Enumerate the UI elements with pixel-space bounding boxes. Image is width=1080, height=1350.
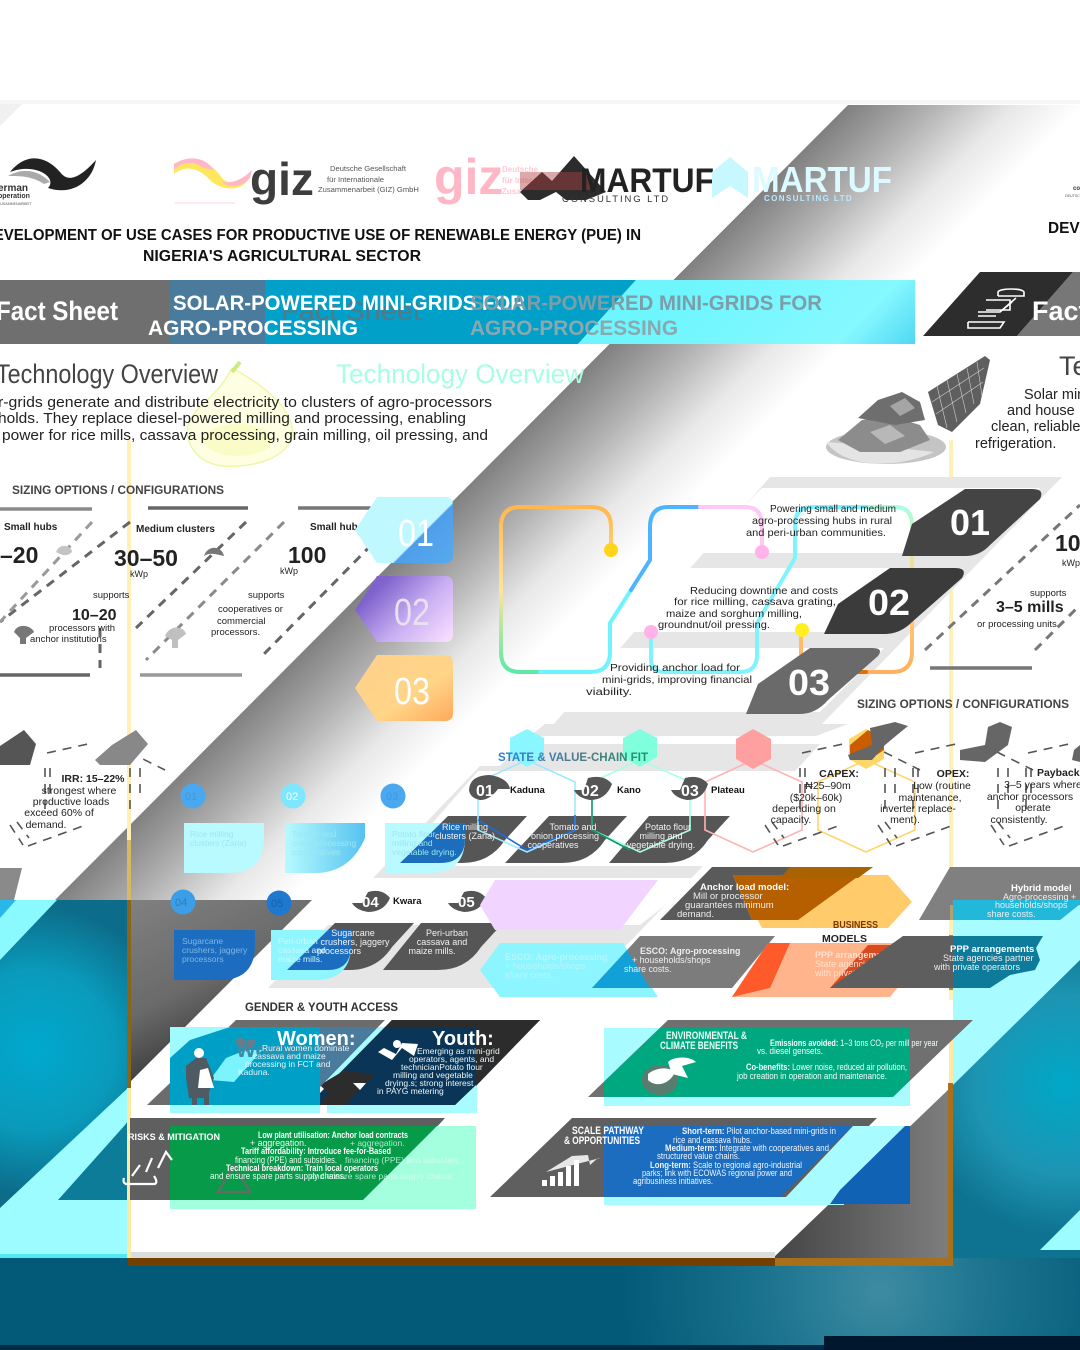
text: payback — [987, 767, 1080, 826]
panel: youth: drying.s; strong interest — [385, 1078, 474, 1088]
banner: fact sheet title bar: Fact Sheet — [0, 296, 118, 326]
chevron 03 — [355, 655, 453, 721]
location cards row 2: maize mills. — [278, 954, 322, 964]
business model PPP ghost: with private operators — [933, 962, 1021, 972]
panel: environmental and climate benefits: job creation in operation and maintenance. — [736, 1071, 887, 1082]
text: overview paragraph — [0, 395, 492, 444]
state card text row 1: milling and — [639, 831, 683, 841]
panel: scale pathway and opportunities: rice and cassava hubs. — [673, 1135, 752, 1146]
text: IRR: IRR: 15–22% — [61, 773, 125, 785]
panel: risks and mitigation: + aggregation. — [250, 1138, 306, 1148]
hex caps left — [0, 730, 148, 765]
panel: scale pathway and opportunities — [490, 1118, 910, 1205]
banner: fact sheet title bar: Fact Sheet — [281, 296, 422, 326]
card: medium clusters: commercial — [217, 616, 266, 627]
benefit 03 text: viability. — [586, 686, 632, 698]
text: IRR: demand. — [26, 819, 66, 831]
location cards row 1: Rice milling — [190, 829, 234, 839]
text: anchor load model: demand. — [677, 909, 714, 920]
state hex caps — [510, 729, 884, 769]
state card text row 1: onion processing — [531, 831, 599, 841]
state blobs row 2 and labels: 04 — [362, 894, 379, 911]
panel: environmental and climate benefits: Co-benefits: Lower noise, reduced air pollution, — [746, 1062, 907, 1073]
benefit 02 text: for rice milling, cassava grating, — [674, 596, 836, 608]
text: CAPEX — [771, 768, 859, 826]
chevron 03: 03 — [394, 671, 430, 713]
location cards row 2: cassava and — [278, 945, 326, 955]
heading: state and value-chain fit: STATE & VALUE-CHAIN FIT — [498, 752, 648, 764]
logo: Martuf dark: CONSULTING LTD — [562, 194, 670, 205]
state card text row 2: Sugarcane — [331, 928, 375, 938]
business model salmon panel: share costs. — [624, 964, 671, 974]
panel: scale pathway and opportunities: Long-term: Scale to regional agro-industrial — [650, 1160, 802, 1171]
panel: risks and mitigation: and ensure spare parts supply chains. — [210, 1171, 346, 1181]
benefit 01 text: Powering small and medium — [770, 503, 896, 515]
logo: Martuf dark: MARTUF — [580, 162, 714, 200]
location cards row 2: crushers, jaggery — [182, 945, 248, 955]
banner: fact sheet title bar: AGRO-PROCESSING — [470, 317, 678, 340]
logo: right ghost: co — [1073, 186, 1080, 192]
state card text row 2: cassava and — [417, 937, 467, 947]
benefit 02 text — [658, 585, 838, 631]
panel: environmental and climate benefits: CLIMATE BENEFITS — [660, 1040, 738, 1052]
location cards row 2: processors — [182, 954, 224, 964]
logo: Martuf dark — [520, 156, 714, 205]
panel: environmental and climate benefits: ENVIRONMENTAL & — [666, 1030, 747, 1042]
panel: women — [147, 1020, 385, 1113]
logo: GIZ pink: für Inter — [502, 176, 532, 185]
benefit 02 tile — [824, 568, 964, 634]
panel: youth — [310, 1020, 540, 1113]
panel: environmental and climate benefits: vs. diesel gensets. — [757, 1046, 823, 1057]
business model orange panel: MODELS — [822, 933, 867, 945]
card: small hubs left: 10–20 — [72, 607, 117, 624]
panel: youth: in PAYG metering — [377, 1086, 444, 1096]
location cards row 2: Peri-urban — [278, 936, 318, 946]
location cards row 1: clusters (Zaria) — [190, 838, 247, 848]
text: overview paragraph: holds. They replace diesel-powered milling and processing, enabling — [0, 411, 466, 427]
finance hex dashed lines — [765, 744, 1069, 846]
state card text row 2: maize mills. — [408, 946, 456, 956]
heading: sizing options right: SIZING OPTIONS / CONFIGURATIONS — [857, 699, 1069, 711]
panel: environmental and climate benefits: Emissions avoided: 1–3 tons CO₂ per mill per year — [770, 1038, 939, 1049]
location cards row 1: Tomato and — [292, 829, 337, 839]
panel: women: Women: — [277, 1028, 356, 1050]
logo: Martuf cyan: MARTUF — [752, 159, 892, 200]
location cards row 1: cooperatives — [292, 847, 340, 857]
logo: GIZ pink: giz — [434, 149, 503, 205]
card: small hubs middle: 100 — [288, 542, 326, 568]
location dots 01-03: 01 — [185, 791, 197, 803]
text: CAPEX: capacity. — [771, 814, 811, 826]
logo: GIZ gray — [174, 153, 419, 205]
benefit 02 text: maize and sorghum milling, — [666, 608, 802, 620]
card: medium clusters: processors. — [211, 627, 260, 638]
banner: fact sheet title bar: SOLAR-POWERED MINI-GRIDS FOR — [470, 292, 822, 315]
business model hybrid ghost: share costs. — [987, 909, 1036, 919]
panel: women: Rural women dominate — [262, 1043, 350, 1053]
state card text row 1: cooperatives — [527, 840, 579, 850]
state card text row 2: processors — [317, 946, 362, 956]
business model hybrid ghost: Agro-processing + — [1003, 892, 1076, 902]
text: overview paragraph right: and house — [1007, 403, 1075, 419]
business model PPP ghost: State agencies partner — [943, 953, 1034, 963]
logo: GIZ pink: Deutsche — [502, 165, 539, 174]
card: right sizing ghost: or processing units — [977, 619, 1057, 630]
card: small hubs middle: Small hubs — [310, 522, 364, 533]
text: OPEX: OPEX: — [937, 768, 969, 780]
text: anchor load model — [677, 882, 789, 920]
benefit 03 text: Providing anchor load for — [610, 662, 741, 674]
location cards row 2: Sugarcane — [182, 936, 223, 946]
panel: scale pathway and opportunities: structured value chains. — [657, 1151, 740, 1162]
text: anchor load model: Anchor load model: — [700, 882, 789, 893]
text: IRR — [24, 773, 125, 831]
panel: youth: Emerging as mini-grid — [417, 1046, 500, 1056]
location cards row 1: vegetable drying. — [392, 847, 457, 857]
panel: risks and mitigation: + aggregation. — [350, 1138, 405, 1148]
text: overview paragraph: power for rice mills, cassava processing, grain milling, oil pressing, and — [2, 428, 488, 444]
location dots 04-05: 04 — [175, 897, 187, 909]
finance hex caps — [848, 722, 1080, 762]
state card text row 1: Potato flour — [645, 822, 691, 832]
card: small hubs left — [0, 522, 130, 645]
state number blobs and labels: 01 — [476, 783, 494, 800]
location cards row 1: Potato flour — [392, 829, 436, 839]
benefit 01 tile — [902, 489, 1041, 556]
panel: women: cassava and maize — [253, 1051, 326, 1061]
title — [0, 220, 1080, 265]
state blobs row 2 and labels — [352, 891, 534, 912]
card: right sizing ghost: 10 — [1055, 530, 1080, 556]
text: overview paragraph right: clean, reliable — [991, 419, 1080, 435]
benefit 01 tile: 01 — [950, 502, 990, 543]
panel: youth: Youth: — [432, 1028, 494, 1050]
top light strip — [0, 100, 1080, 104]
logo: GIZ gray: giz — [250, 153, 314, 205]
logo: Martuf cyan — [712, 157, 892, 203]
banner: right dark fact sheet tile — [923, 272, 1080, 336]
panel: scale pathway and opportunities: SCALE PATHWAY — [572, 1125, 645, 1137]
banner: fact sheet title bar: SOLAR-POWERED MINI-GRIDS FOR — [173, 292, 525, 315]
snake connector lines — [501, 507, 912, 672]
business model PPP ghost: PPP arrangements — [950, 944, 1034, 955]
business model pink panel — [480, 880, 658, 930]
location cards row 2 — [174, 930, 351, 980]
benefit 02 tile: 02 — [868, 582, 910, 623]
cards: sizing configuration outlines — [0, 508, 396, 675]
panel: risks and mitigation: Technical breakdown: Train local operators — [226, 1163, 378, 1173]
logo: Martuf cyan: CONSULTING LTD — [764, 194, 853, 203]
state blobs row 2 and labels: FCT/Abuja — [486, 896, 534, 907]
state number blobs and labels: Kano — [617, 785, 641, 796]
text: overview paragraph right: refrigeration. — [975, 436, 1056, 452]
panel: scale pathway and opportunities: Medium-term: Integrate with cooperatives and — [665, 1143, 829, 1154]
benefit 01 text — [746, 503, 896, 539]
chevron 01 — [355, 497, 453, 563]
panel: risks and mitigation: financing (PPE) and subsidies. — [345, 1155, 461, 1165]
state number blobs and labels: Plateau — [711, 785, 745, 796]
state card text row 1: clusters (Zaria) — [435, 831, 495, 841]
card: medium clusters — [114, 524, 285, 648]
business model cyan panel: + households/shops — [505, 961, 586, 971]
corner ghost — [0, 104, 22, 126]
diagonal gray band — [55, 105, 1080, 900]
card: right sizing ghost: 3–5 mills — [996, 599, 1064, 616]
text: anchor load model: Mill or processor — [693, 891, 763, 902]
benefit 03 text — [586, 662, 752, 698]
business model orange panel — [660, 867, 912, 945]
finance hexagon dashes: IRR — [10, 744, 165, 846]
state number blobs and labels: 02 — [581, 783, 599, 800]
card: right sizing ghost: kWp — [1062, 558, 1080, 568]
card: medium clusters: cooperatives or — [218, 604, 283, 615]
card: small hubs middle: kWp — [280, 566, 298, 576]
location dots 01-03: 02 — [286, 791, 298, 803]
title: DEV — [1048, 220, 1080, 237]
state blobs row 2 and labels: Kwara — [393, 896, 422, 907]
location dots 01-03 — [180, 784, 406, 808]
panel: youth: technicianPotato flour — [401, 1062, 483, 1072]
ghost panel bands behind benefit rows — [268, 477, 1062, 988]
location cards row 1: onion processing — [292, 838, 357, 848]
text: OPEX: inverter replace- — [880, 803, 956, 815]
text: OPEX — [880, 768, 971, 826]
location cards row 1 — [184, 823, 465, 873]
connector dots — [604, 543, 809, 639]
state number blobs and labels: 03 — [681, 783, 699, 800]
business model orange panel: BUSINESS — [833, 919, 878, 931]
panel: risks and mitigation: RISKS & MITIGATION — [128, 1132, 220, 1142]
text: OPEX: ment). — [890, 814, 920, 826]
business model cyan panel — [480, 943, 658, 997]
location dots 04-05: 05 — [271, 898, 283, 910]
text: CAPEX: ($20k–60k) — [790, 792, 842, 804]
heading: technology overview gray: Technology Overview — [0, 359, 218, 389]
text: OPEX: maintenance, — [898, 792, 962, 804]
card: small hubs left: processors with — [49, 623, 115, 634]
state number blobs and labels — [469, 775, 745, 800]
card: medium clusters: supports — [248, 590, 285, 601]
business model cyan panel: ESCO: Agro-processing — [505, 952, 608, 962]
text: CAPEX: ₦25–90m — [805, 780, 851, 792]
logo: GIZ pink: Zusam — [502, 187, 528, 196]
dark poster corners — [128, 900, 953, 1266]
state card text row 2 — [317, 928, 468, 956]
logo: right ghost — [1065, 186, 1080, 198]
chevron 01: 01 — [398, 513, 434, 555]
card: small hubs left: –20 — [0, 542, 38, 568]
business model salmon panel: ESCO: Agro-processing — [640, 946, 740, 956]
text: IRR: productive loads — [33, 796, 109, 808]
panel: youth: operators, agents, and — [409, 1054, 494, 1064]
panel: risks and mitigation: financing (PPE) and subsidies. — [235, 1155, 337, 1165]
text: CAPEX: depending on — [772, 803, 836, 815]
text: payback: operate — [1015, 802, 1051, 814]
benefit 01 text: agro-processing hubs in rural — [752, 515, 892, 527]
business model hybrid ghost: Hybrid model — [1011, 883, 1072, 894]
card: medium clusters: kWp — [130, 569, 148, 579]
banner: fact sheet title bar: AGRO-PROCESSING — [148, 317, 358, 340]
panel: risks and mitigation — [124, 1118, 476, 1209]
card: medium clusters: 30–50 — [114, 545, 178, 571]
text: IRR: strongest where — [42, 785, 117, 797]
panel: women: processing in FCT and — [245, 1059, 331, 1069]
image: solar mini-grid model — [826, 356, 990, 464]
business model hybrid ghost: households/shops — [995, 900, 1068, 910]
image: fruit ghost — [187, 362, 292, 466]
text: overview paragraph: r-grids generate and distribute electricity to clusters of agro-processors — [0, 395, 492, 411]
state card text row 1: Rice milling — [442, 822, 488, 832]
panel: youth: milling and vegetable — [393, 1070, 473, 1080]
benefit 03 tile: 03 — [788, 662, 830, 703]
state hex outlines — [478, 760, 915, 852]
logo: GIZ pink — [434, 149, 539, 205]
title: NIGERIA'S AGRICULTURAL SECTOR — [143, 248, 421, 265]
banner: fact sheet title bar — [0, 280, 915, 344]
heading: gender and youth: GENDER & YOUTH ACCESS — [245, 1002, 398, 1014]
logo: GIZ gray: Zusammenarbeit (GIZ) GmbH — [318, 185, 419, 194]
text: payback: anchor processors — [987, 791, 1073, 803]
panel: risks and mitigation: Low plant utilisation: Anchor load contracts — [258, 1130, 408, 1140]
panel: scale pathway and opportunities: Short-term: Pilot anchor-based mini-grids in — [682, 1126, 836, 1137]
benefit 02 text: groundnut/oil pressing. — [658, 619, 770, 631]
state card text row 2: crushers, jaggery — [320, 937, 390, 947]
business model cyan panel: share costs. — [505, 970, 554, 980]
card: small hubs middle — [280, 522, 364, 576]
panel: women: Kaduna. — [238, 1067, 270, 1077]
text: payback: 3–5 years where — [1004, 779, 1080, 791]
card: small hubs left: anchor institutions — [30, 634, 107, 645]
business model hybrid ghost — [919, 867, 1080, 920]
business model PPP ghost — [830, 936, 1043, 988]
title: DEVELOPMENT OF USE CASES FOR PRODUCTIVE USE OF RENEWABLE ENERGY (PUE) IN — [0, 227, 641, 244]
card: medium clusters: Medium clusters — [136, 524, 215, 535]
text: payback: consistently. — [990, 814, 1048, 826]
business model salmon panel: + households/shops — [632, 955, 711, 965]
teal backgrounds — [0, 900, 1080, 1350]
panel: scale pathway and opportunities: & OPPORTUNITIES — [564, 1135, 640, 1147]
text: OPEX: Low (routine — [913, 780, 971, 792]
location dots 04-05 — [170, 890, 292, 916]
state cards dark row 1 — [400, 816, 730, 863]
poster side frame lines — [127, 440, 953, 1263]
card: right sizing ghost — [925, 505, 1080, 668]
benefit 02 text: Reducing downtime and costs — [690, 585, 838, 597]
logo: German cooperation — [0, 158, 96, 206]
benefit 03 text: mini-grids, improving financial — [602, 674, 752, 686]
panel: environmental and climate benefits — [588, 1020, 973, 1106]
text: overview paragraph right — [975, 387, 1080, 452]
location dots 01-03: 03 — [386, 791, 398, 803]
location cards row 1: milling and — [392, 838, 433, 848]
state card text row 1: Tomato and — [549, 822, 597, 832]
text: CAPEX: CAPEX: — [819, 768, 859, 780]
state card text row 2: Peri-urban — [426, 928, 468, 938]
left edge ghost — [0, 868, 22, 900]
card: small hubs left: Small hubs — [4, 522, 58, 533]
state blobs row 2 and labels: 05 — [458, 894, 475, 911]
panel: scale pathway and opportunities: agribusiness initiatives. — [633, 1176, 713, 1187]
chevron 02 — [355, 576, 453, 642]
state cards dark row 2 — [287, 923, 503, 970]
panel: risks and mitigation: and ensure spare parts supply chains. — [310, 1171, 454, 1181]
text: anchor load model: guarantees minimum — [685, 900, 774, 911]
benefit 03 tile — [746, 648, 880, 714]
state number blobs and labels: Kaduna — [510, 785, 546, 796]
logo: GIZ gray: für Internationale — [327, 175, 384, 184]
state card text row 1: vegetable drying. — [627, 840, 695, 850]
panel: women: Women: — [236, 1039, 318, 1062]
card: right sizing ghost: supports — [1030, 588, 1067, 599]
business model salmon panel: PPP arrangements — [815, 950, 895, 960]
text: IRR: exceed 60% of — [24, 807, 94, 819]
heading: technology overview mint: Technology Overview — [336, 359, 584, 389]
state card text row 1 — [435, 822, 695, 850]
business model salmon panel: with private operators — [814, 968, 902, 978]
card: small hubs left: supports — [93, 590, 130, 601]
logo: GIZ gray: Deutsche Gesellschaft — [330, 164, 407, 173]
heading: sizing options: SIZING OPTIONS / CONFIGURATIONS — [12, 485, 224, 497]
benefit 01 text: and peri-urban communities. — [746, 527, 886, 539]
panel: risks and mitigation: Tariff affordability: Introduce fee-for-Based — [241, 1146, 391, 1156]
business model salmon panel — [592, 936, 912, 997]
panel: scale pathway and opportunities: parks; link with ECOWAS regional power and — [642, 1168, 792, 1179]
chevron 02: 02 — [394, 592, 430, 634]
business model salmon panel: State agencies partner — [815, 959, 906, 969]
